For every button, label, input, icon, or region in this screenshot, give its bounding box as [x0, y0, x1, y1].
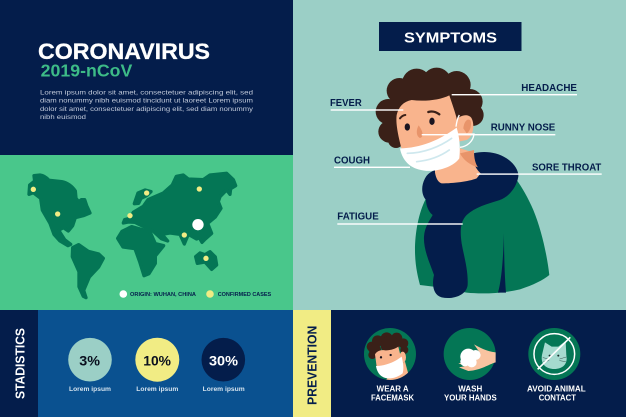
panel: world map [0, 155, 293, 310]
stat: 30%: 30% [209, 352, 239, 368]
prevention heading: PREVENTION [306, 326, 320, 405]
item: avoid animal contact: AVOID ANIMAL [527, 385, 586, 394]
item: avoid animal contact [527, 328, 586, 403]
statistics heading: STADISTICS [12, 328, 27, 399]
item: wear a facemask [364, 328, 416, 403]
label: runny nose: RUNNY NOSE [491, 122, 555, 134]
label: runny nose [422, 122, 555, 135]
map legend [120, 290, 271, 298]
stat: 3% [68, 338, 112, 393]
stat: 10%: 10% [143, 352, 172, 368]
map markers [31, 186, 209, 261]
intro text block [40, 90, 254, 121]
panel: symptoms [293, 0, 626, 310]
intro text block: nibh euismod [40, 114, 86, 121]
item: wash your hands [444, 328, 497, 403]
world map [29, 173, 236, 298]
symptoms heading: SYMPTOMS [404, 30, 497, 46]
symptom callouts [330, 82, 602, 225]
panel: intro [0, 0, 293, 155]
item: wear a facemask: FACEMASK [371, 394, 414, 403]
label: fever: FEVER [330, 97, 362, 109]
stat: 30%: Lorem ipsum [203, 387, 245, 393]
label: sore throat [477, 162, 602, 175]
item: wash your hands: YOUR HANDS [444, 394, 497, 403]
intro text block: dolor sit amet, consectetuer adipiscing elit, sed diam nonummy [40, 106, 254, 113]
item: wash your hands: WASH [458, 385, 483, 394]
illustration: person body [415, 147, 549, 298]
illustration: face mask [400, 115, 474, 171]
intro text block: diam nonummy nibh euismod tincidunt ut laoreet Lorem ipsum [40, 98, 254, 105]
stat: 30% [202, 338, 245, 393]
label: fever [330, 97, 403, 111]
stat: 10%: Lorem ipsum [136, 387, 178, 393]
item: wear a facemask: WEAR A [377, 385, 409, 394]
panel: prevention [293, 310, 586, 417]
map legend: ORIGIN: WUHAN, CHINA [130, 292, 196, 298]
label: headache [452, 82, 577, 95]
stat: 3%: Lorem ipsum [69, 387, 111, 393]
stat: 3%: 3% [79, 352, 101, 368]
map legend: CONFIRMED CASES [218, 292, 271, 298]
item: avoid animal contact: CONTACT [539, 394, 576, 403]
stat: 10% [135, 338, 179, 393]
label: fatigue: FATIGUE [337, 210, 379, 222]
intro text block: Lorem ipsum dolor sit amet, consectetuer adipiscing elit, sed [40, 90, 253, 97]
panel: statistics [0, 310, 293, 417]
label: cough [334, 154, 410, 168]
subtitle: 2019-nCoV [41, 61, 133, 81]
label: sore throat: SORE THROAT [532, 162, 602, 174]
illustration: person head [376, 68, 484, 167]
label: fatigue [337, 210, 463, 225]
title: CORONAVIRUS [38, 39, 210, 64]
label: headache: HEADACHE [521, 82, 577, 94]
symptoms heading [379, 22, 522, 51]
label: cough: COUGH [334, 154, 370, 166]
